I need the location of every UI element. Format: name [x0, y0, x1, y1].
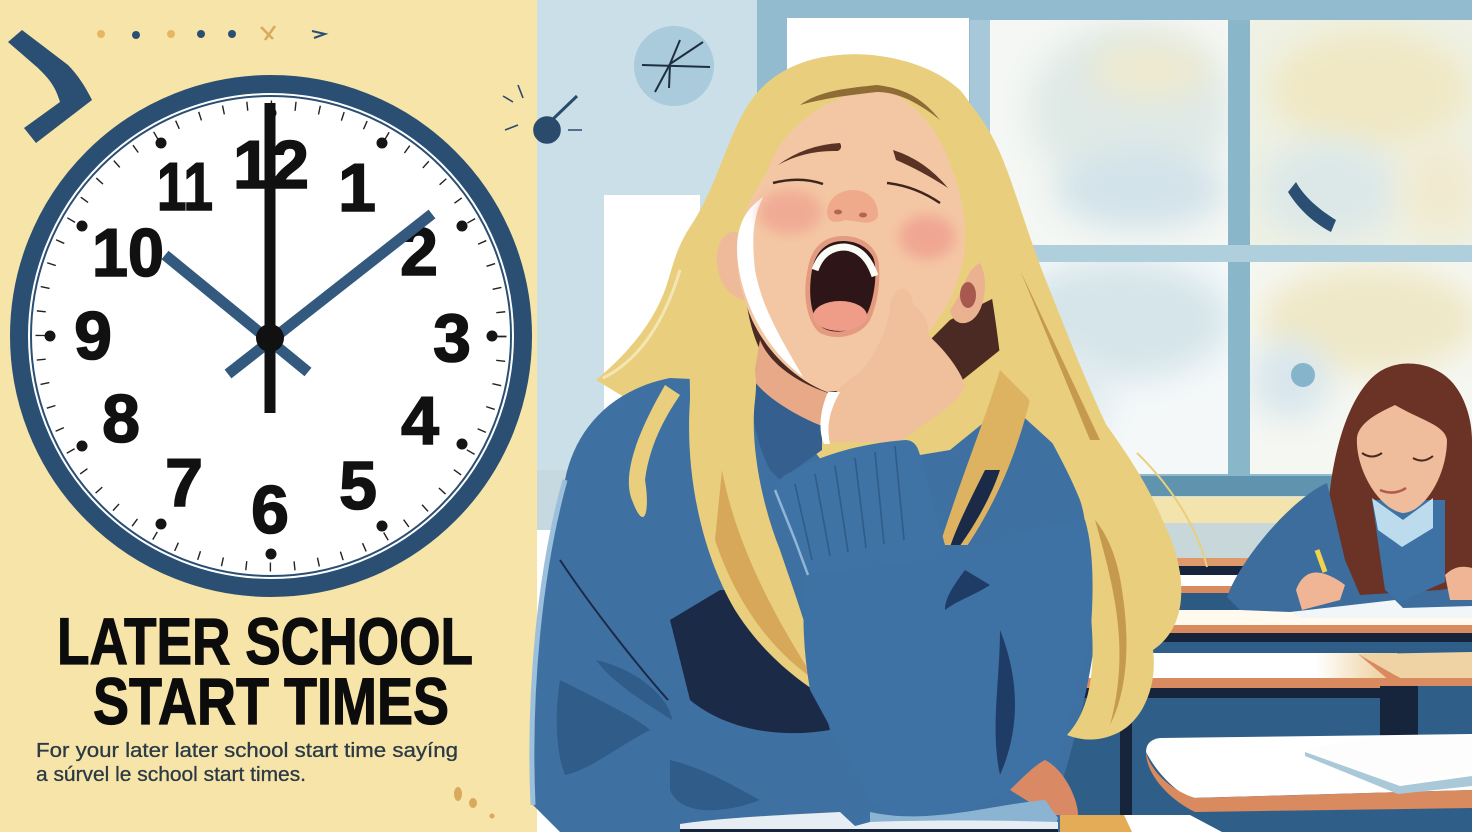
- clock numerals: 10: [92, 215, 164, 291]
- panel: classroom background: [537, 0, 1472, 832]
- title: [57, 604, 473, 738]
- right hair strand shadow: [1020, 270, 1126, 725]
- student vest: [1372, 500, 1445, 602]
- clock numerals: [74, 127, 471, 548]
- clock numerals: 3: [433, 300, 471, 376]
- left hair lock shadow: [715, 470, 815, 680]
- hairline shadow: [800, 85, 940, 120]
- clock hands: [165, 255, 308, 372]
- subtitle text: For your later later school start time sayíng: [36, 740, 458, 762]
- sweater light edge: [532, 480, 565, 805]
- icon: navy dash accent: [1288, 182, 1336, 232]
- decorative marks bottom: [454, 787, 494, 818]
- neck: [753, 340, 835, 426]
- right hair wisp: [1137, 453, 1207, 567]
- right inner hair dark strand: [945, 470, 1000, 565]
- face: [737, 85, 965, 392]
- hair back: [596, 54, 1180, 600]
- clock numerals: 9: [74, 298, 112, 374]
- nose: [827, 190, 878, 223]
- clock numerals: 11: [157, 149, 213, 225]
- icon: navy corner bracket: [8, 30, 92, 143]
- clock numerals: 5: [339, 448, 377, 524]
- cheek blush: [758, 190, 822, 234]
- student sweater: [1227, 483, 1472, 612]
- clock numerals: 4: [401, 383, 439, 459]
- right hair tail: [1005, 250, 1181, 740]
- hand supporting face: [822, 289, 965, 442]
- forearm fold shadows: [945, 570, 1015, 775]
- title: LATER SCHOOL: [57, 604, 473, 678]
- clock rim: [19, 84, 523, 588]
- left thin lock: [629, 385, 680, 517]
- mouth: [805, 236, 879, 337]
- clock numerals: 12: [233, 127, 309, 203]
- ribbed collar: [752, 380, 822, 480]
- brows: [778, 143, 948, 188]
- left hair lock: [687, 270, 830, 700]
- right inner hair strands: [935, 370, 1030, 570]
- clock numerals: 1: [338, 150, 376, 226]
- student hair: [1327, 364, 1472, 600]
- clock numerals: 2: [400, 214, 438, 290]
- clock numerals: 6: [251, 472, 289, 548]
- title: START TIMES: [93, 664, 449, 738]
- icon: small wall clock: [634, 26, 714, 106]
- student face: [1357, 405, 1447, 513]
- cheek blush right: [899, 215, 955, 259]
- left ear: [717, 232, 750, 300]
- minute ticks: [40, 105, 502, 567]
- illustration: main yawning student: [532, 54, 1207, 832]
- sweater torso: [532, 378, 1097, 832]
- icon: blue dot accent: [1291, 363, 1315, 387]
- hair top and front frame: [695, 54, 1060, 450]
- chart: large wall clock: [19, 84, 523, 588]
- forearm: [803, 520, 1093, 818]
- subtitle text: [36, 740, 458, 786]
- clock numerals: 8: [102, 381, 140, 457]
- white face highlight: [737, 197, 803, 377]
- icon: ball with motion lines: [503, 85, 582, 143]
- desks: [1060, 558, 1472, 832]
- right ear: [950, 263, 985, 323]
- student hands and pencil: [1317, 550, 1325, 572]
- student collar: [1372, 498, 1433, 547]
- closed eyes: [773, 180, 940, 203]
- sweater fold shading: [557, 560, 760, 810]
- subtitle text: a súrvel le school start times.: [36, 764, 306, 786]
- student book: [1290, 600, 1472, 618]
- illustration: background student writing: [1227, 364, 1472, 618]
- left outer hair wisp: [600, 290, 700, 383]
- white halo at hair: [603, 270, 680, 378]
- open book: [680, 800, 1058, 832]
- decorative dots row: [97, 26, 325, 40]
- hour dots: [44, 108, 498, 560]
- clock numerals: 7: [165, 445, 203, 521]
- white wrist highlight: [821, 392, 840, 444]
- ribbed sleeve cuff: [775, 440, 945, 575]
- dark shadow under arm: [670, 590, 830, 733]
- dark hair behind neck: [745, 290, 1010, 430]
- hand resting on desk: [1010, 760, 1078, 815]
- panel: left yellow background: [0, 0, 537, 832]
